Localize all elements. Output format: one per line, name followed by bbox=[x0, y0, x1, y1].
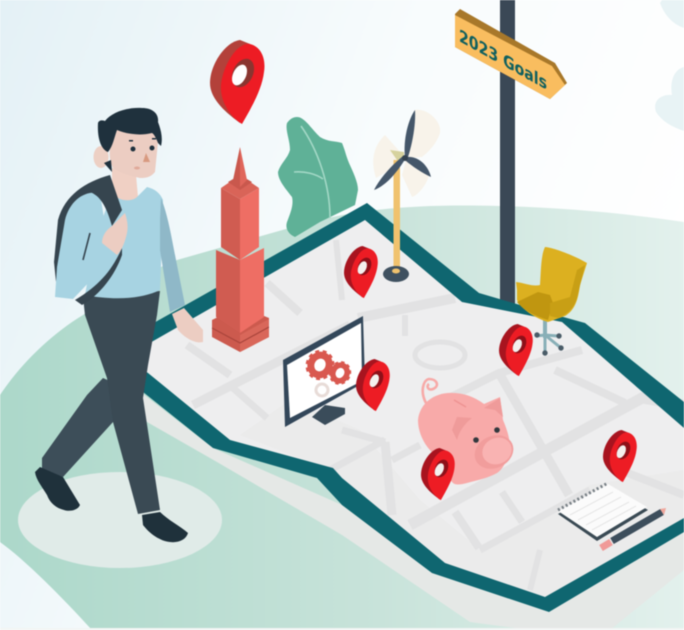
shirt torso bbox=[85, 187, 163, 298]
near sleeve bbox=[55, 192, 115, 299]
location pin: by chair bbox=[499, 324, 533, 376]
wind turbine bbox=[373, 110, 440, 282]
pencil bbox=[601, 508, 666, 548]
monitor with gears bbox=[283, 316, 365, 427]
location pin: by piggy bank bbox=[421, 448, 455, 500]
skyscraper bbox=[212, 147, 269, 352]
piggy bank bbox=[418, 379, 519, 484]
nose bbox=[143, 153, 150, 162]
neck bbox=[112, 168, 138, 202]
map roads bbox=[187, 240, 684, 590]
lower map tint bbox=[240, 400, 684, 600]
front shoe bbox=[142, 512, 188, 542]
hand on strap bbox=[102, 213, 128, 255]
hair bbox=[98, 108, 162, 152]
floor shadow under walker bbox=[18, 472, 222, 568]
backpack strap bbox=[90, 175, 122, 226]
map bbox=[120, 203, 684, 612]
green ground blob bbox=[0, 206, 684, 630]
far sleeve bbox=[160, 198, 185, 312]
leaf plant bbox=[278, 117, 358, 237]
bottom edge strip bbox=[0, 628, 684, 630]
mouth bbox=[134, 166, 140, 170]
faint background leaves bbox=[655, 0, 684, 131]
signpost: 2023 Goals bbox=[455, 9, 567, 99]
location pin: large above skyscraper bbox=[210, 40, 264, 124]
location pin: above notebook bbox=[603, 430, 637, 482]
signpost pole bbox=[500, 0, 515, 305]
face bbox=[110, 128, 158, 178]
gears bbox=[302, 347, 354, 387]
notebook bbox=[558, 483, 648, 541]
signpost: 2023 Goals: 2023 Goals bbox=[459, 26, 547, 94]
map sheet bbox=[120, 214, 684, 600]
location pin: near turbine bbox=[344, 246, 378, 298]
eyes bbox=[129, 138, 156, 152]
back shoe bbox=[35, 467, 80, 511]
ear bbox=[94, 146, 108, 168]
nape hair bbox=[104, 160, 112, 172]
backpack bbox=[54, 175, 110, 282]
front leg and hips bbox=[83, 291, 160, 514]
sleeve fold bbox=[83, 233, 90, 260]
back leg bbox=[42, 378, 118, 477]
map border bbox=[120, 203, 684, 612]
map shadow bbox=[125, 380, 684, 630]
person walking bbox=[35, 108, 203, 542]
far hand bbox=[172, 308, 203, 342]
armchair bbox=[516, 247, 587, 356]
location pin: by monitor bbox=[356, 359, 390, 411]
